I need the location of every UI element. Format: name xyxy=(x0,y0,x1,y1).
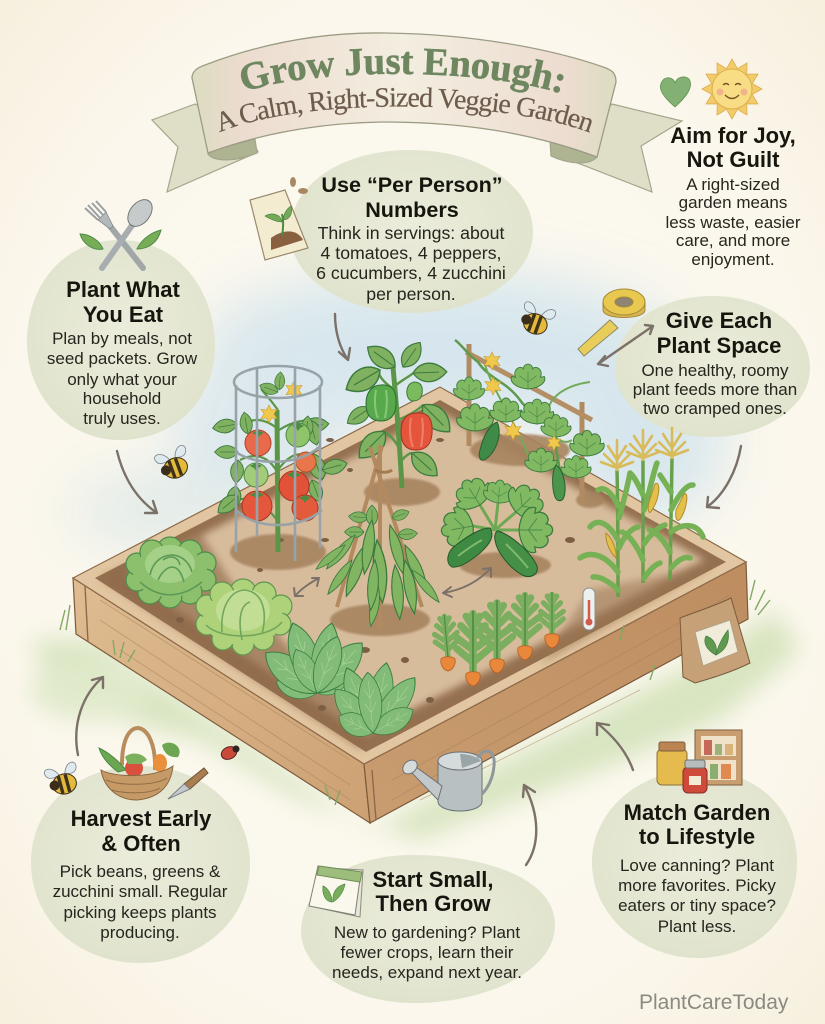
callout: start small then grow xyxy=(332,867,522,982)
bean teepee xyxy=(314,445,442,628)
callout: plant what you eat: truly uses. xyxy=(83,409,161,428)
callout: aim for joy xyxy=(665,123,801,269)
callout: give each plant space: One healthy, roomy xyxy=(641,361,789,380)
icon: calendar xyxy=(309,866,363,917)
callout blobs xyxy=(27,150,810,1003)
callout: start small then grow: New to gardening? Plant xyxy=(334,923,520,942)
icon: preserve jars and shelf xyxy=(657,730,742,793)
arrow: match lifestyle xyxy=(597,723,633,770)
zucchini plant xyxy=(438,470,553,577)
watering can xyxy=(400,751,494,811)
callout: use per person numbers: per person. xyxy=(366,284,456,304)
callout: use per person numbers: Think in servings: about xyxy=(318,223,504,243)
callout: harvest early and often: & Often xyxy=(101,831,181,856)
callout: plant what you eat: only what your xyxy=(67,370,177,389)
callout: match garden to lifestyle xyxy=(618,800,776,936)
callout: harvest early and often: picking keeps plants xyxy=(63,903,217,922)
fertilizer bag xyxy=(680,598,750,683)
watermark: PlantCareToday xyxy=(639,991,789,1014)
icon: garden knife xyxy=(168,768,208,799)
callout: plant what you eat: Plan by meals, not xyxy=(52,329,192,348)
callout: plant what you eat: You Eat xyxy=(83,302,164,327)
banner subheading: A Calm, Right-Sized Veggie Garden xyxy=(219,87,592,133)
callout: harvest early and often: Harvest Early xyxy=(71,806,212,831)
callout: aim for joy: Not Guilt xyxy=(687,147,780,172)
ribbon banner title xyxy=(151,32,684,193)
callout: match garden to lifestyle: Plant less. xyxy=(658,917,736,936)
arrow: per person xyxy=(335,314,350,360)
callout: plant what you eat: household xyxy=(83,389,161,408)
zucchini fruit xyxy=(448,528,492,567)
corn plants xyxy=(580,428,703,597)
pepper plant xyxy=(341,338,457,488)
arrow: measure tape xyxy=(598,325,653,366)
callout: match garden to lifestyle: Love canning? Plant xyxy=(620,856,774,875)
callout: give each plant space xyxy=(633,308,797,418)
callout: aim for joy: garden means xyxy=(679,193,787,212)
red pepper xyxy=(401,413,432,450)
banner body xyxy=(192,33,616,157)
callout: plant what you eat: Plant What xyxy=(66,277,181,302)
callout: use per person numbers: 6 cucumbers, 4 zucchini xyxy=(316,263,506,283)
callout: harvest early and often: producing. xyxy=(100,923,180,942)
icon: measuring tape xyxy=(578,289,645,356)
icon: seed packet xyxy=(250,177,308,260)
callout: start small then grow: needs, expand next year. xyxy=(332,963,522,982)
icon: fork and spoon xyxy=(80,195,161,268)
soil xyxy=(95,400,726,752)
grass tufts xyxy=(60,580,770,805)
tomato cage and plant xyxy=(211,366,349,561)
callout: harvest early and often xyxy=(53,806,228,942)
arrows to bed xyxy=(76,314,741,865)
icon: heart xyxy=(660,77,691,107)
callout: harvest early and often: zucchini small. Regular xyxy=(53,882,228,901)
bees xyxy=(43,300,557,798)
cucumber trellis xyxy=(453,340,604,505)
callout: give each plant space: two cramped ones. xyxy=(643,399,787,418)
callout: aim for joy: A right-sized xyxy=(686,175,780,194)
callout: use per person numbers xyxy=(316,172,506,304)
callout: aim for joy: enjoyment. xyxy=(691,250,775,269)
soil patches xyxy=(230,434,604,636)
icon: harvest basket xyxy=(99,728,180,800)
bed right front face xyxy=(364,562,748,823)
icon: sun xyxy=(702,59,762,119)
callout: match garden to lifestyle: eaters or tiny space? xyxy=(618,896,776,915)
callout: match garden to lifestyle: to Lifestyle xyxy=(639,824,755,849)
callout: match garden to lifestyle: Match Garden xyxy=(624,800,770,825)
callout: aim for joy: care, and more xyxy=(676,231,790,250)
lettuce heads xyxy=(126,537,292,655)
callout: match garden to lifestyle: more favorites. Picky xyxy=(618,876,776,895)
arrow: plant what you eat xyxy=(117,451,157,513)
spinach plants xyxy=(257,619,424,743)
callout: aim for joy: Aim for Joy, xyxy=(670,123,796,148)
spacing arrows in bed xyxy=(294,568,491,597)
callout: start small then grow: Then Grow xyxy=(376,891,491,916)
arrow: harvest xyxy=(76,677,103,755)
banner heading: Grow Just Enough: xyxy=(240,48,564,93)
callout: harvest early and often: Pick beans, greens & xyxy=(60,862,221,881)
thermometer xyxy=(583,588,595,630)
callout: use per person numbers: 4 tomatoes, 4 peppers, xyxy=(321,243,501,263)
arrow: start small xyxy=(523,785,536,865)
callout: give each plant space: Plant Space xyxy=(657,333,781,358)
ladybug xyxy=(219,744,240,762)
banner tails xyxy=(152,104,682,192)
callout: plant what you eat: seed packets. Grow xyxy=(47,349,198,368)
bed rim xyxy=(73,387,746,764)
green pepper xyxy=(366,385,396,421)
callout: use per person numbers: Numbers xyxy=(365,197,459,222)
callout: use per person numbers: Use “Per Person” xyxy=(321,172,503,197)
callout: give each plant space: plant feeds more than xyxy=(633,380,797,399)
background washes: sky and grass xyxy=(30,270,800,840)
raised garden bed xyxy=(73,387,748,823)
bed left front face xyxy=(73,578,370,823)
callout: start small then grow: Start Small, xyxy=(372,867,494,892)
carrots xyxy=(433,592,563,686)
arrow: plant space xyxy=(707,446,741,508)
callout: start small then grow: fewer crops, learn their xyxy=(341,943,514,962)
callout: give each plant space: Give Each xyxy=(666,308,772,333)
callout: plant what you eat xyxy=(47,277,198,428)
callout: aim for joy: less waste, easier xyxy=(665,213,801,232)
